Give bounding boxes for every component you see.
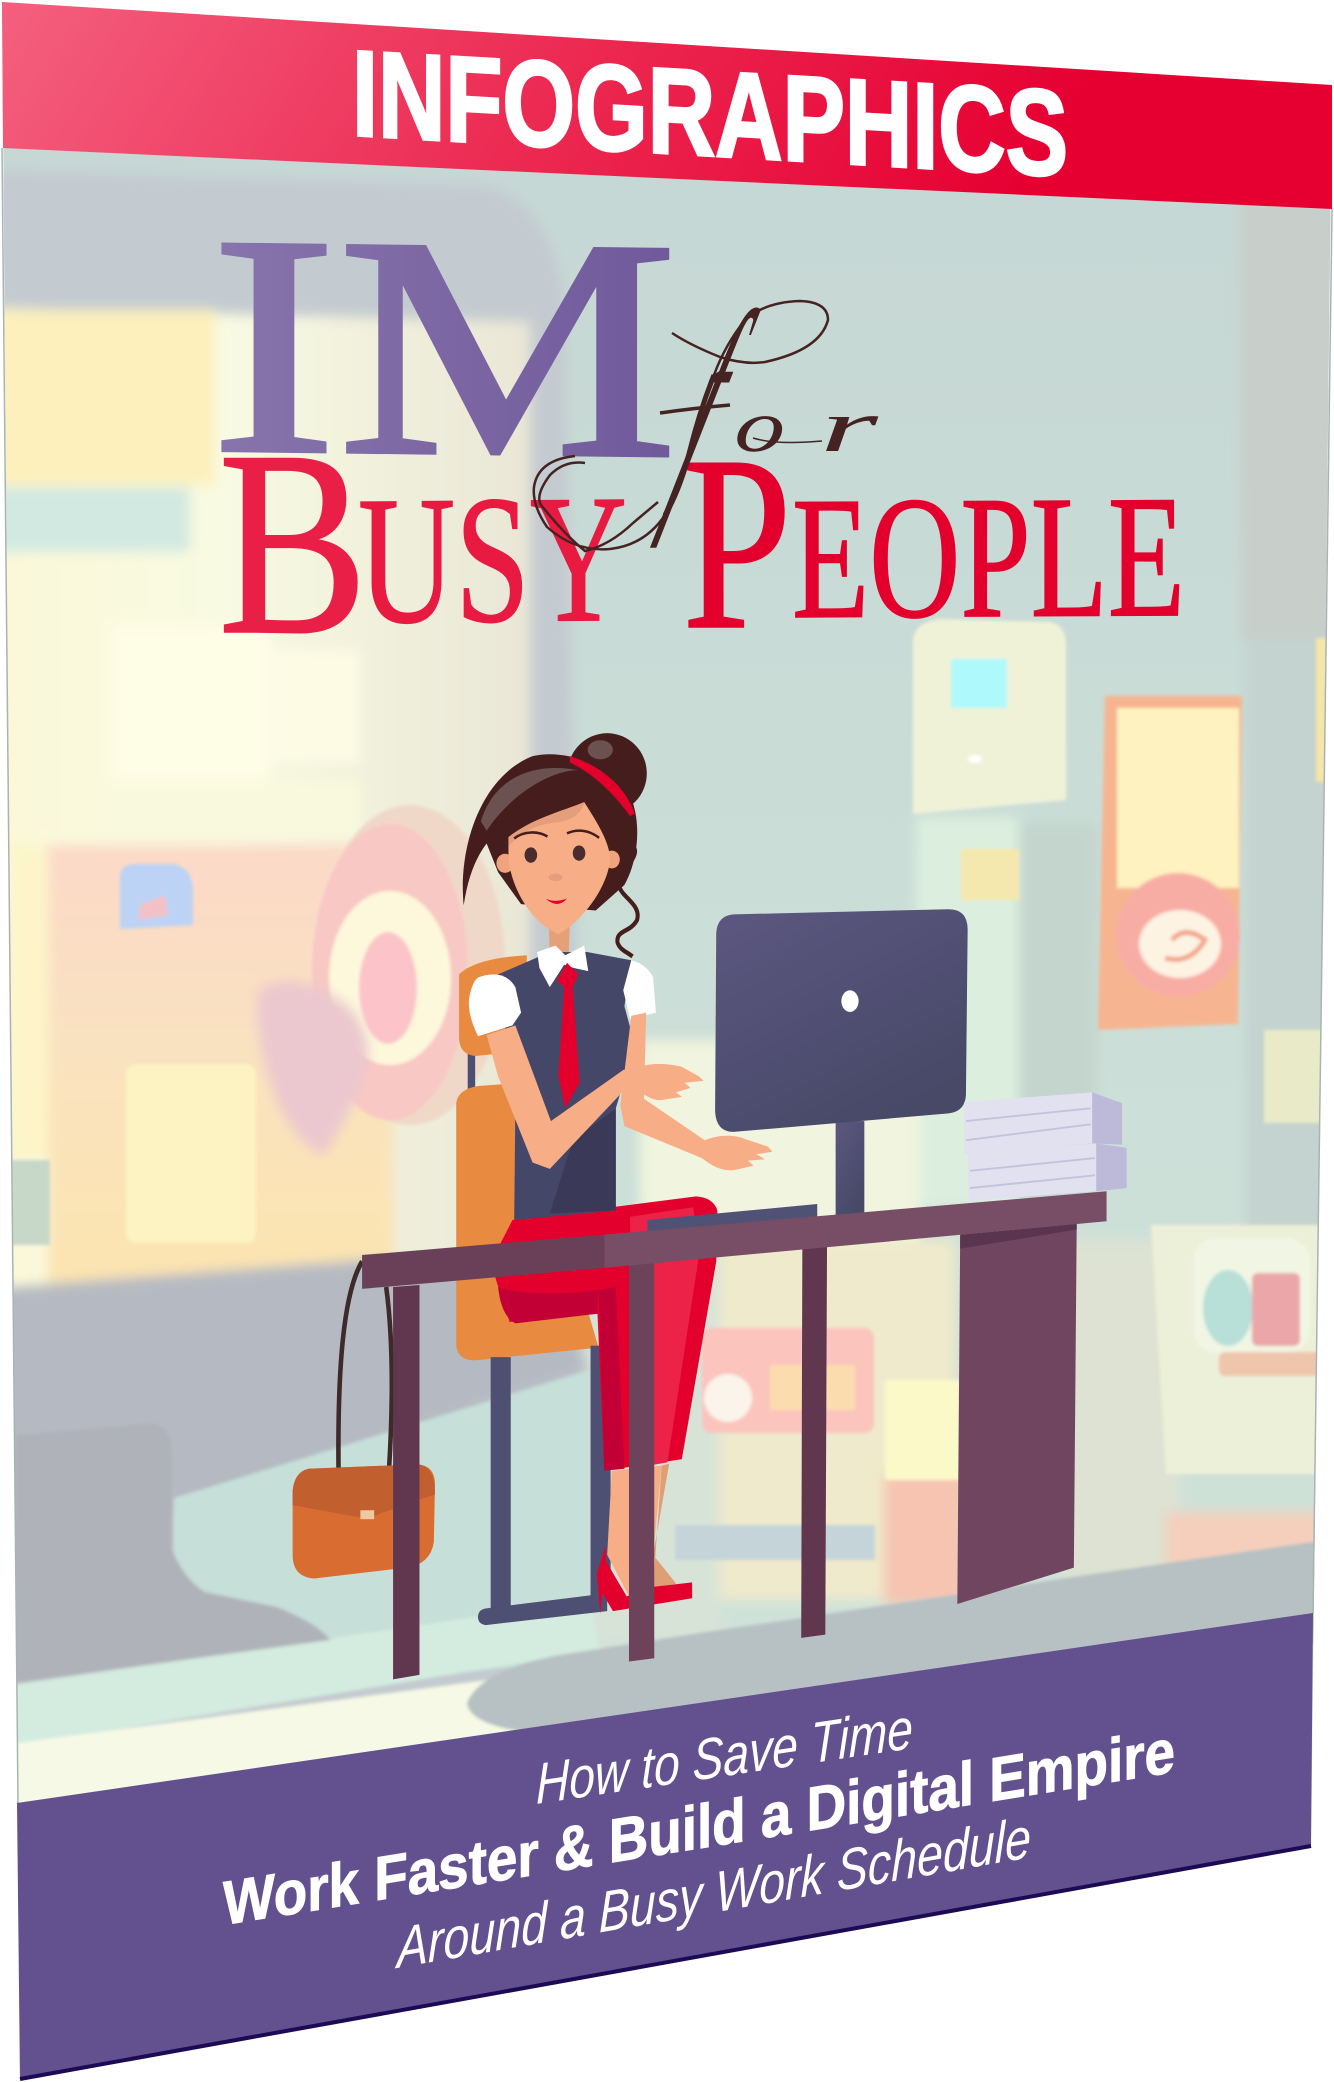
title: IM: IM: [210, 170, 678, 524]
title: for script: [534, 259, 880, 551]
neck: [549, 920, 570, 954]
collar: [537, 946, 588, 987]
far arm: [620, 1013, 772, 1170]
title: for script: f: [649, 259, 778, 549]
vest: [498, 952, 633, 1220]
face: [496, 802, 620, 934]
legs and shoes: [597, 1464, 692, 1614]
illustration: woman at desk: [293, 733, 1127, 1679]
bottom panel: [17, 1613, 1313, 2080]
subtitle line 3: Around a Busy Work Schedule: [395, 1805, 1031, 1981]
near arm: [487, 1025, 704, 1169]
title: People: P: [682, 405, 792, 682]
title: for script: o: [731, 386, 789, 468]
title: Busy: [218, 397, 627, 690]
desk: [362, 1191, 1107, 1679]
hair: [463, 733, 647, 956]
subtitle line 2: Work Faster & Build a Digital Empire: [223, 1717, 1175, 1939]
trousers: [495, 1196, 717, 1471]
title: [210, 170, 1185, 690]
subtitle line 1: How to Save Time: [536, 1696, 913, 1817]
handbag: [293, 1261, 435, 1579]
woman: [463, 733, 772, 1614]
title: People: EOPLE: [792, 459, 1185, 655]
sleeves: [469, 974, 521, 1036]
title: Busy: USY: [358, 457, 627, 662]
title: for script: r: [820, 386, 880, 468]
title: Busy: B: [218, 397, 368, 690]
computer monitor: [715, 909, 968, 1217]
top banner: [2, 2, 1332, 209]
tie: [557, 963, 580, 1108]
banner heading: INFOGRAPHICS: [352, 24, 1068, 202]
title: People: [682, 405, 1185, 682]
keyboard: [647, 1204, 817, 1234]
office chair: [456, 955, 611, 1625]
stack of papers: [964, 1092, 1127, 1201]
